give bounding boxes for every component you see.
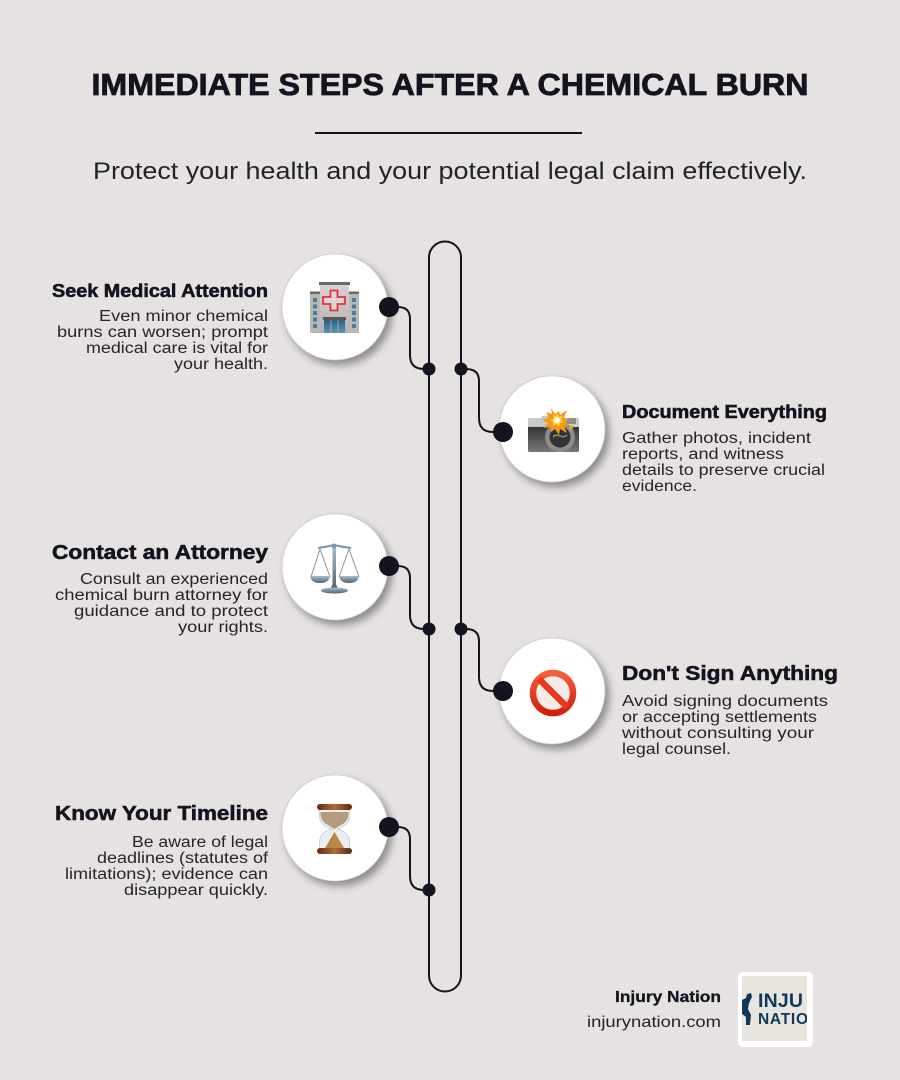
step 2 body text: Gather photos, incident — [622, 430, 812, 447]
step 3 body text: guidance and to protect — [74, 603, 269, 620]
step 5 body text: deadlines (statutes of — [97, 850, 269, 867]
icon: prohibited sign — [533, 673, 573, 713]
step 1 icon circle — [282, 254, 388, 360]
title: IMMEDIATE STEPS AFTER A CHEMICAL BURN — [92, 67, 808, 102]
step 1: seek medical attention — [52, 254, 436, 376]
step 1 track dot — [422, 362, 436, 376]
step 2 heading: Document Everything — [622, 402, 827, 422]
step 1 heading: Seek Medical Attention — [52, 281, 268, 301]
step 3 track dot — [422, 622, 436, 636]
step 5 icon circle — [282, 775, 388, 881]
step 5 body text: Be aware of legal — [132, 834, 268, 851]
step 3 body text: your rights. — [178, 619, 268, 636]
step 2 track dot — [454, 362, 468, 376]
step 1 body text — [57, 308, 269, 373]
step 4 icon circle — [499, 638, 605, 744]
step 3: contact an attorney — [52, 514, 436, 636]
step 3 icon circle — [282, 514, 388, 620]
step 2: document everything — [454, 362, 827, 495]
step 1 body text: medical care is vital for — [86, 340, 268, 357]
step 2 node — [493, 422, 513, 442]
step 4 body text: Avoid signing documents — [622, 693, 828, 710]
step 5 node — [379, 817, 399, 837]
step 1 body text: your health. — [174, 356, 268, 373]
step 4 node — [493, 681, 513, 701]
step 5: know your timeline — [55, 775, 436, 899]
subtitle: Protect your health and your potential legal claim effectively. — [93, 158, 807, 185]
step 5 body text — [65, 834, 269, 899]
step 2 icon circle — [499, 376, 605, 482]
step 5 track dot — [422, 884, 436, 896]
step 2 body text: details to preserve crucial — [622, 462, 825, 479]
logo: INJU — [758, 990, 803, 1012]
footer brand name: Injury Nation — [615, 989, 721, 1006]
step 1 node — [379, 297, 399, 317]
step 2 body text: evidence. — [622, 478, 697, 495]
step 1 connector — [389, 307, 429, 369]
step 5 body text: disappear quickly. — [124, 882, 268, 899]
step 4 body text: without consulting your — [621, 725, 814, 742]
icon: camera with flash — [528, 408, 579, 452]
step 3 body text — [55, 571, 269, 636]
step 3 connector — [389, 566, 429, 629]
step 1 body text: Even minor chemical — [99, 308, 268, 325]
step 1 body text: burns can worsen; prompt — [57, 324, 269, 341]
step 4 track dot — [454, 622, 468, 636]
timeline track — [429, 242, 461, 992]
logo — [738, 972, 813, 1047]
footer website: injurynation.com — [587, 1014, 721, 1031]
icon: hospital — [310, 282, 359, 333]
step 4: don't sign anything — [454, 622, 838, 758]
icon: scales of justice — [310, 544, 359, 594]
step 3 heading: Contact an Attorney — [52, 542, 269, 564]
step 4 body text — [621, 693, 828, 758]
step 4 body text: or accepting settlements — [622, 709, 817, 726]
step 3 body text: chemical burn attorney for — [55, 587, 268, 604]
step 3 node — [379, 556, 399, 576]
step 2 body text — [622, 430, 825, 495]
step 3 body text: Consult an experienced — [80, 571, 268, 588]
step 4 body text: legal counsel. — [622, 741, 731, 758]
icon: hourglass — [317, 804, 352, 854]
step 2 connector — [461, 369, 503, 432]
step 4 heading: Don't Sign Anything — [622, 663, 838, 685]
logo: NATIO — [758, 1011, 808, 1028]
step 4 connector — [461, 629, 503, 691]
infographic — [52, 73, 837, 1047]
step 5 body text: limitations); evidence can — [65, 866, 268, 883]
step 5 heading: Know Your Timeline — [55, 803, 268, 825]
step 5 connector — [389, 827, 429, 890]
step 2 body text: reports, and witness — [622, 446, 784, 463]
